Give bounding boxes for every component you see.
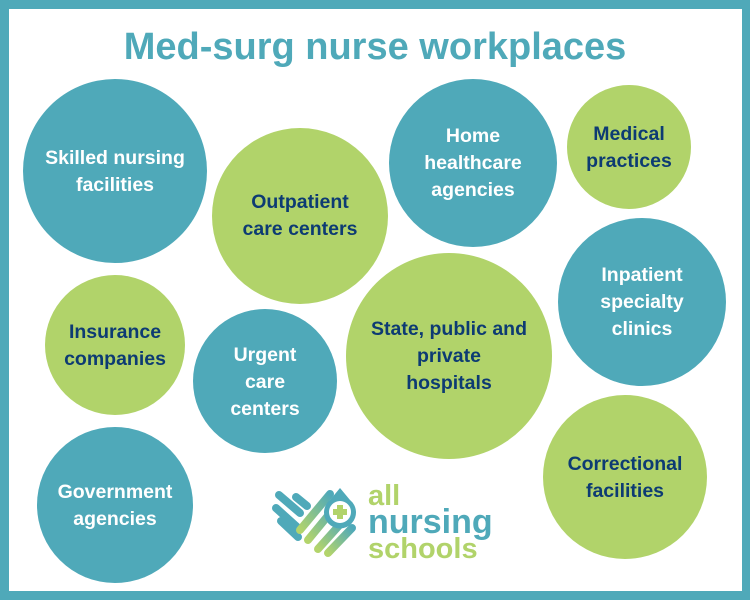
circle: outpatient care centers: Outpatient [251,191,349,213]
circle: outpatient care centers [212,128,388,304]
circle: correctional facilities: Correctional [568,453,682,475]
circle: government agencies: Government [58,481,173,503]
circle: government agencies: agencies [73,508,157,530]
circle: urgent care centers: care [245,371,285,393]
circle: medical practices [567,85,691,209]
circle: insurance companies: companies [64,348,166,370]
circle: skilled nursing facilities: Skilled nursing [45,147,185,169]
circle: medical practices: practices [586,150,672,172]
circle: inpatient specialty clinics [558,218,726,386]
logo: nursing [368,503,493,541]
circle: urgent care centers: centers [230,398,300,420]
circle: state public private hospitals: private [417,345,481,367]
circle: home healthcare agencies: agencies [431,179,515,201]
circle: urgent care centers [193,309,337,453]
circle: correctional facilities: facilities [586,480,664,502]
circle: medical practices: Medical [593,123,665,145]
circle: home healthcare agencies: healthcare [424,152,522,174]
circle: inpatient specialty clinics: specialty [600,291,684,313]
circle: insurance companies [45,275,185,415]
logo text: all [368,480,400,512]
circle: urgent care centers: Urgent [234,344,297,366]
circle: skilled nursing facilities [23,79,207,263]
logo: schools [368,533,478,565]
logo [276,480,493,565]
circle: state public private hospitals: hospitals [406,372,492,394]
circle: inpatient specialty clinics: Inpatient [601,264,683,286]
circle: home healthcare agencies [389,79,557,247]
circle: insurance companies: Insurance [69,321,161,343]
circle: skilled nursing facilities: facilities [76,174,154,196]
circle: outpatient care centers: care centers [243,218,358,240]
circle: state public private hospitals: State, public and [371,318,527,340]
circle: government agencies [37,427,193,583]
title: Med-surg nurse workplaces [124,26,626,68]
circle: inpatient specialty clinics: clinics [612,318,673,340]
circle: state public private hospitals [346,253,552,459]
circle: home healthcare agencies: Home [446,125,500,147]
icon: hands and drop [276,494,352,553]
circle: correctional facilities [543,395,707,559]
